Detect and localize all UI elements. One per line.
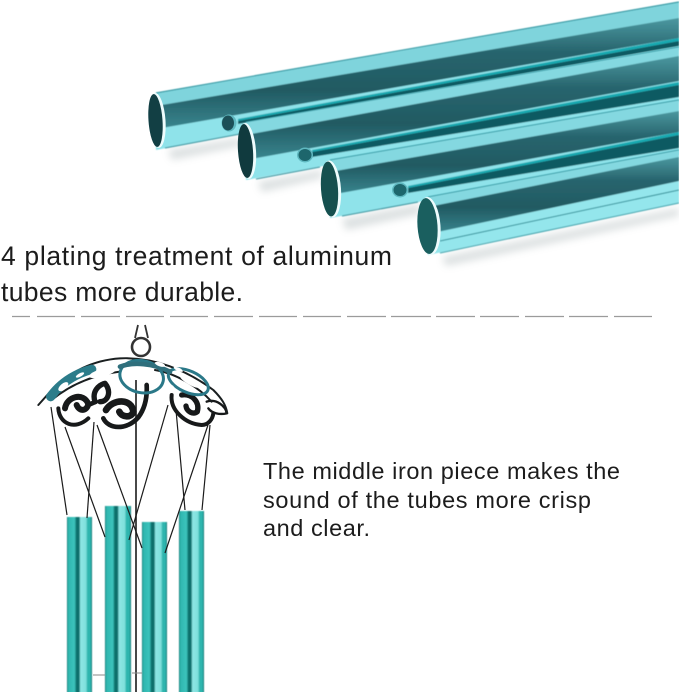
tube shadows [168,138,679,266]
tube 2 mouth [236,122,258,180]
teal ring centre [117,356,166,397]
tube 4 mouth [416,196,442,256]
hanging ring and hook [132,325,150,356]
teal patina band left [51,369,92,397]
tube 3 mouth [319,160,343,218]
teal ring right [164,363,212,400]
tube 3 [330,100,679,218]
caption: middle iron piece: sound of the tubes more crisp [263,487,591,513]
caption: middle iron piece: The middle iron piece makes the [263,458,620,484]
heading: plating treatment: 4 plating treatment of aluminum [1,241,392,271]
heading: plating treatment: tubes more durable. [1,277,243,307]
tube 2 [246,47,679,180]
dome arc [38,358,227,413]
tube 1 [156,2,679,150]
tube 4 [428,150,679,255]
teal web [120,364,170,372]
heading: plating treatment [1,241,392,307]
caption: middle iron piece: and clear. [263,515,370,541]
chime tubes [67,506,204,692]
iron canopy piece [38,356,227,427]
suspension wires [51,380,210,692]
clapper links [93,673,142,675]
tube 1 hole [222,114,236,132]
photo: wind chime [38,325,227,692]
black scrollwork [58,383,227,427]
tube 3 hole [392,182,408,198]
caption: middle iron piece [263,458,620,541]
photo: four plated aluminum tubes [147,2,679,266]
tube 1 mouth [147,92,167,149]
tube 2 hole [297,148,313,162]
white openings [57,360,222,415]
